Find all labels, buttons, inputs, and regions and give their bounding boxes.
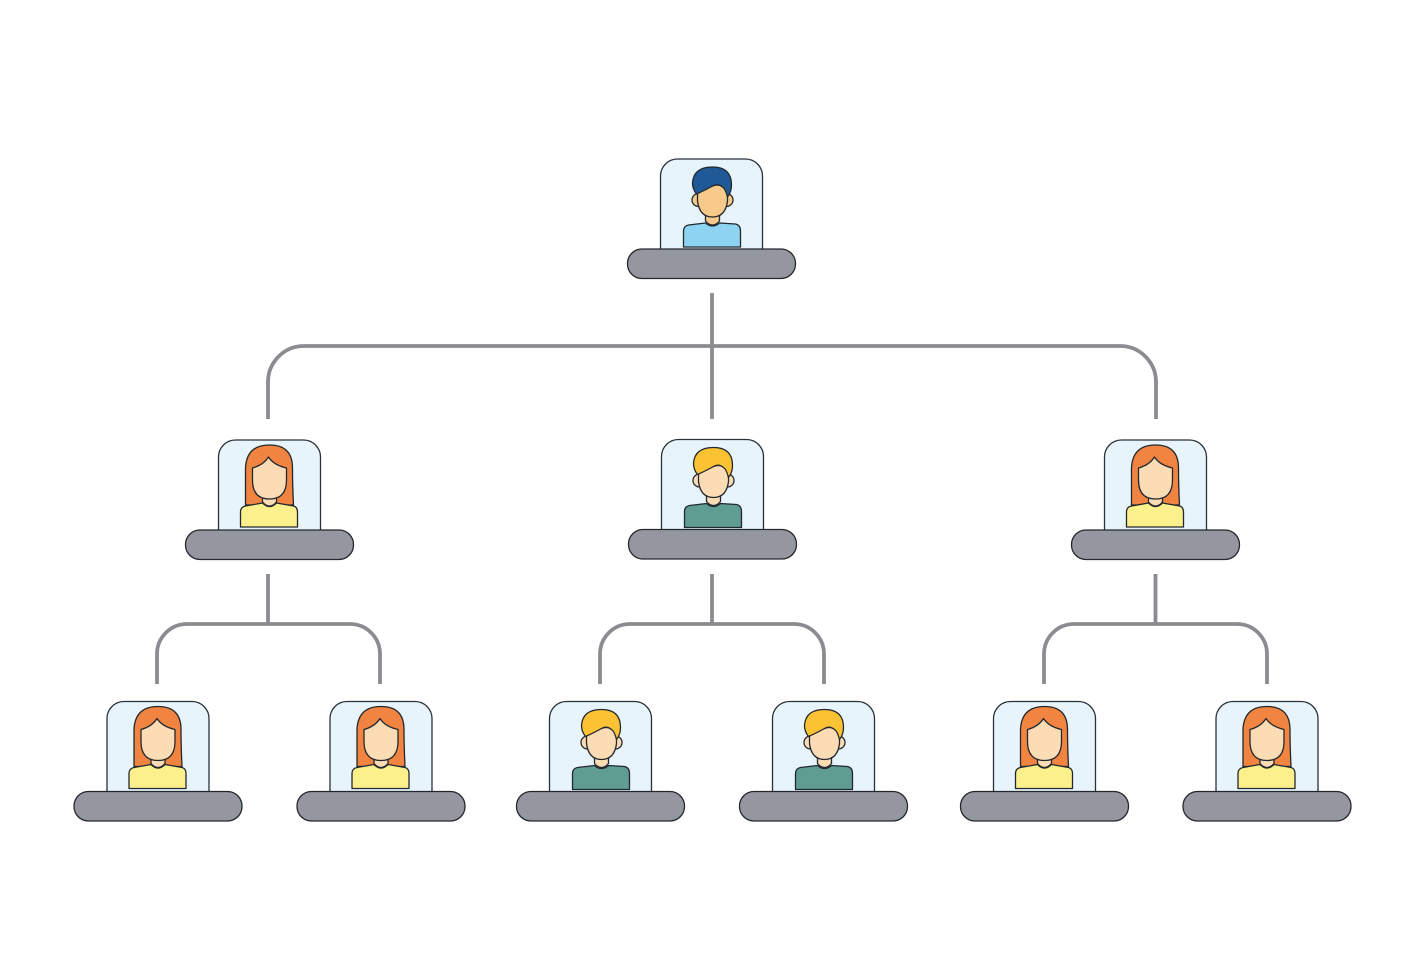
node: staff 4 [740, 702, 908, 821]
node: staff 5 [960, 702, 1128, 821]
node: staff 2 [297, 702, 465, 821]
connector: middle branch [600, 574, 824, 684]
node: top manager [628, 159, 796, 278]
node: staff 3 [516, 702, 684, 821]
node: middle manager [628, 440, 796, 559]
node: left manager [186, 440, 354, 560]
connector: left branch [157, 574, 380, 684]
connector: top level to level two [268, 293, 1156, 419]
node: staff 6 [1183, 702, 1351, 821]
node: staff 1 [74, 702, 242, 821]
connector: right branch [1044, 574, 1267, 684]
node: right manager [1072, 440, 1240, 560]
